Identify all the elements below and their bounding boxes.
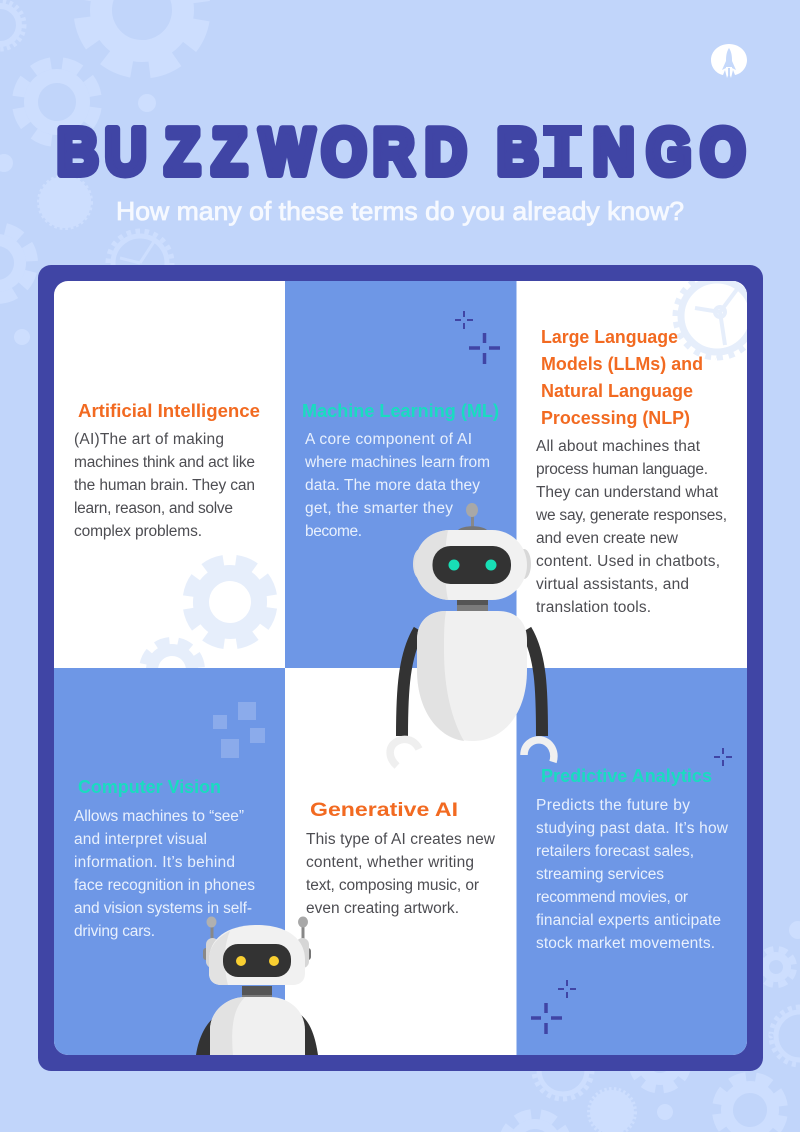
sparkles: predictive analytics bottom bbox=[531, 980, 576, 1034]
text block: computer vision: and interpret visual bbox=[74, 831, 207, 848]
text block: machine learning: get, the smarter they bbox=[305, 500, 453, 517]
robot head bbox=[209, 925, 305, 985]
text block: predictive analytics: studying past data. It’s how bbox=[536, 820, 729, 837]
text block: predictive analytics: stock market movements. bbox=[536, 935, 715, 952]
text block: large language models: Processing (NLP) bbox=[541, 408, 690, 428]
text block: generative ai: content, whether writing bbox=[306, 854, 474, 871]
text block: computer vision: and vision systems in self- bbox=[74, 900, 252, 917]
text block: large language models: Natural Language bbox=[541, 381, 693, 401]
cell gears: artificial intelligence bbox=[140, 555, 277, 668]
text block: generative ai: This type of AI creates new bbox=[306, 831, 496, 848]
text block: predictive analytics bbox=[536, 766, 729, 952]
text block: large language models: Large Language bbox=[541, 327, 678, 347]
text block: predictive analytics: Predictive Analytics bbox=[541, 766, 712, 786]
text block: machine learning: Machine Learning (ML) bbox=[302, 401, 499, 421]
text block: large language models: translation tools. bbox=[536, 599, 651, 616]
text block: generative ai: text, composing music, or bbox=[306, 877, 479, 894]
text block: large language models: and even create new bbox=[536, 530, 679, 547]
robot antennas bbox=[203, 916, 311, 968]
robot neck bbox=[242, 986, 272, 998]
text block: artificial intelligence: Artificial Intelligence bbox=[78, 401, 260, 421]
robot head bbox=[413, 530, 531, 600]
robot hands bbox=[390, 739, 554, 766]
sparkles: machine learning bbox=[455, 311, 500, 364]
text block: artificial intelligence: (AI)The art of making bbox=[74, 431, 224, 448]
text block: computer vision: face recognition in phones bbox=[74, 877, 255, 894]
robot shoulders bbox=[196, 1014, 318, 1055]
text block: machine learning: become. bbox=[305, 523, 362, 540]
subtitle: How many of these terms do you already know? bbox=[116, 196, 684, 226]
text block: large language models bbox=[535, 327, 727, 616]
robot antenna bbox=[458, 503, 487, 530]
text block: artificial intelligence bbox=[74, 401, 260, 540]
text block: predictive analytics: streaming services bbox=[536, 866, 664, 883]
text block: large language models: we say, generate responses, bbox=[535, 507, 727, 524]
text block: artificial intelligence: learn, reason, and solve bbox=[74, 500, 233, 517]
robot neck bbox=[457, 600, 488, 611]
text block: artificial intelligence: the human brain. They can bbox=[74, 477, 255, 494]
robot: large teal-eyed robot bbox=[390, 503, 554, 766]
text block: computer vision: Computer Vision bbox=[78, 777, 221, 797]
text block: generative ai: Generative AI bbox=[310, 800, 458, 821]
text block: large language models: process human language. bbox=[536, 461, 708, 478]
text block: generative ai bbox=[306, 800, 496, 917]
text block: computer vision: information. It’s behind bbox=[74, 854, 235, 871]
text block: generative ai: even creating artwork. bbox=[306, 900, 459, 917]
text block: machine learning: where machines learn from bbox=[304, 454, 490, 471]
text block: computer vision bbox=[74, 777, 255, 940]
text block: large language models: content. Used in chatbots, bbox=[536, 553, 720, 570]
background gears: bottom right bbox=[498, 921, 800, 1132]
text block: predictive analytics: Predicts the future by bbox=[536, 797, 690, 814]
text block: machine learning bbox=[302, 401, 499, 540]
sparkle: predictive analytics top bbox=[714, 748, 732, 766]
text block: machine learning: data. The more data they bbox=[305, 477, 480, 494]
text block: large language models: They can understand what bbox=[536, 484, 719, 501]
decorative squares: computer vision bbox=[213, 702, 265, 758]
text block: large language models: All about machines that bbox=[536, 438, 701, 455]
robot arms bbox=[402, 630, 542, 736]
icon: rocket logo bbox=[711, 44, 747, 78]
text block: computer vision: driving cars. bbox=[74, 923, 155, 940]
robot body bbox=[210, 997, 305, 1056]
background gears: top left bbox=[0, 0, 212, 345]
text block: predictive analytics: financial experts anticipate bbox=[536, 912, 721, 929]
text block: large language models: Models (LLMs) and bbox=[541, 354, 703, 374]
title: BUZZWORD BINGO bbox=[57, 116, 745, 188]
robot: small yellow-eyed robot bbox=[196, 916, 318, 1056]
robot body bbox=[417, 611, 527, 741]
text block: artificial intelligence: complex problems. bbox=[74, 523, 202, 540]
panel: bingo grid bbox=[54, 281, 747, 1055]
text block: predictive analytics: retailers forecast sales, bbox=[536, 843, 694, 860]
text block: predictive analytics: recommend movies, or bbox=[536, 889, 688, 906]
text block: artificial intelligence: machines think and act like bbox=[74, 454, 255, 471]
cell gear: language models bbox=[672, 281, 747, 360]
text block: computer vision: Allows machines to “see” bbox=[74, 808, 244, 825]
panel: bingo board frame bbox=[38, 265, 763, 1071]
text block: machine learning: A core component of AI bbox=[305, 431, 472, 448]
text block: large language models: virtual assistants, and bbox=[536, 576, 689, 593]
